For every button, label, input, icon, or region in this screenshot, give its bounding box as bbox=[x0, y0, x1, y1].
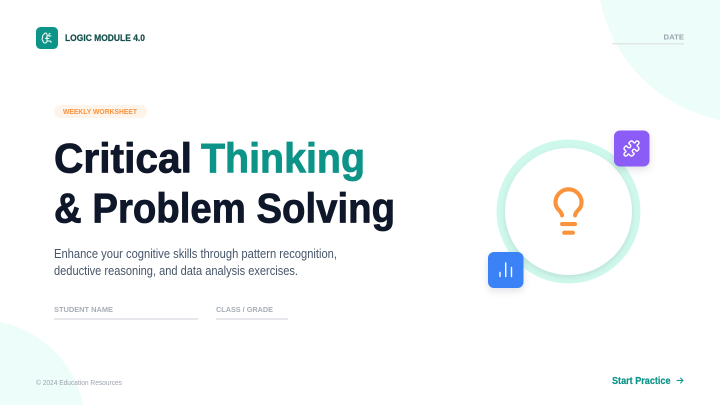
background blob: bottom left bbox=[0, 322, 83, 405]
outer ring bbox=[496, 140, 640, 284]
field: class / grade bbox=[216, 305, 288, 320]
icon card: bar chart bbox=[488, 252, 524, 288]
icon: lightbulb bbox=[556, 189, 582, 233]
field: class / grade: CLASS / GRADE bbox=[216, 305, 273, 314]
logo bbox=[36, 27, 145, 49]
badge: weekly worksheet bbox=[54, 105, 147, 118]
call to action: start practice: Start Practice bbox=[612, 376, 671, 387]
date label: DATE bbox=[664, 32, 684, 42]
logo icon bbox=[36, 27, 58, 49]
description text bbox=[54, 247, 337, 278]
footer copyright: © 2024 Education Resources bbox=[36, 378, 122, 387]
title line 1: Thinking bbox=[201, 134, 365, 182]
icon card: puzzle bbox=[614, 130, 650, 166]
illustration: lightbulb circle bbox=[496, 140, 640, 284]
title bbox=[54, 134, 395, 232]
badge: weekly worksheet: WEEKLY WORKSHEET bbox=[63, 107, 137, 116]
field: student name: STUDENT NAME bbox=[54, 305, 113, 314]
inner circle bbox=[505, 148, 632, 275]
background blob: top right bbox=[600, 0, 720, 120]
title line 1 bbox=[54, 134, 365, 182]
icon: arrow bbox=[677, 378, 683, 383]
logo label: LOGIC MODULE 4.0 bbox=[65, 33, 145, 43]
title line 1: Critical bbox=[54, 134, 192, 182]
date line bbox=[612, 43, 684, 44]
title line 2: & Problem Solving bbox=[54, 184, 395, 232]
date field bbox=[612, 32, 684, 44]
description text: Enhance your cognitive skills through pattern recognition, bbox=[54, 247, 337, 261]
description text: deductive reasoning, and data analysis exercises. bbox=[54, 264, 298, 278]
